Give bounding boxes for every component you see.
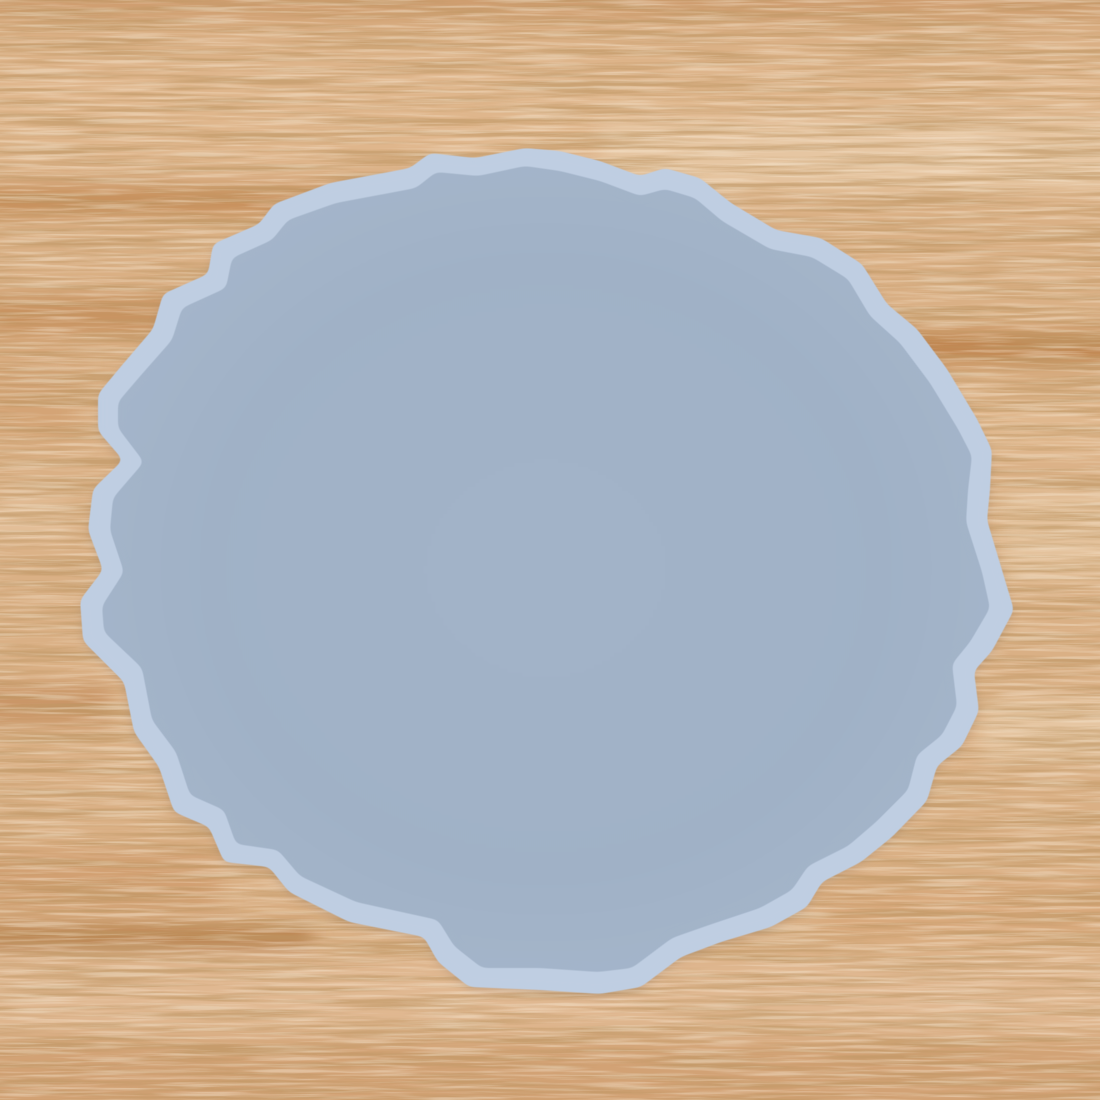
silicone mold	[80, 148, 1014, 996]
mold inner recess	[102, 166, 990, 972]
mold outer rim	[80, 148, 1014, 994]
mold shadow	[82, 154, 1012, 996]
